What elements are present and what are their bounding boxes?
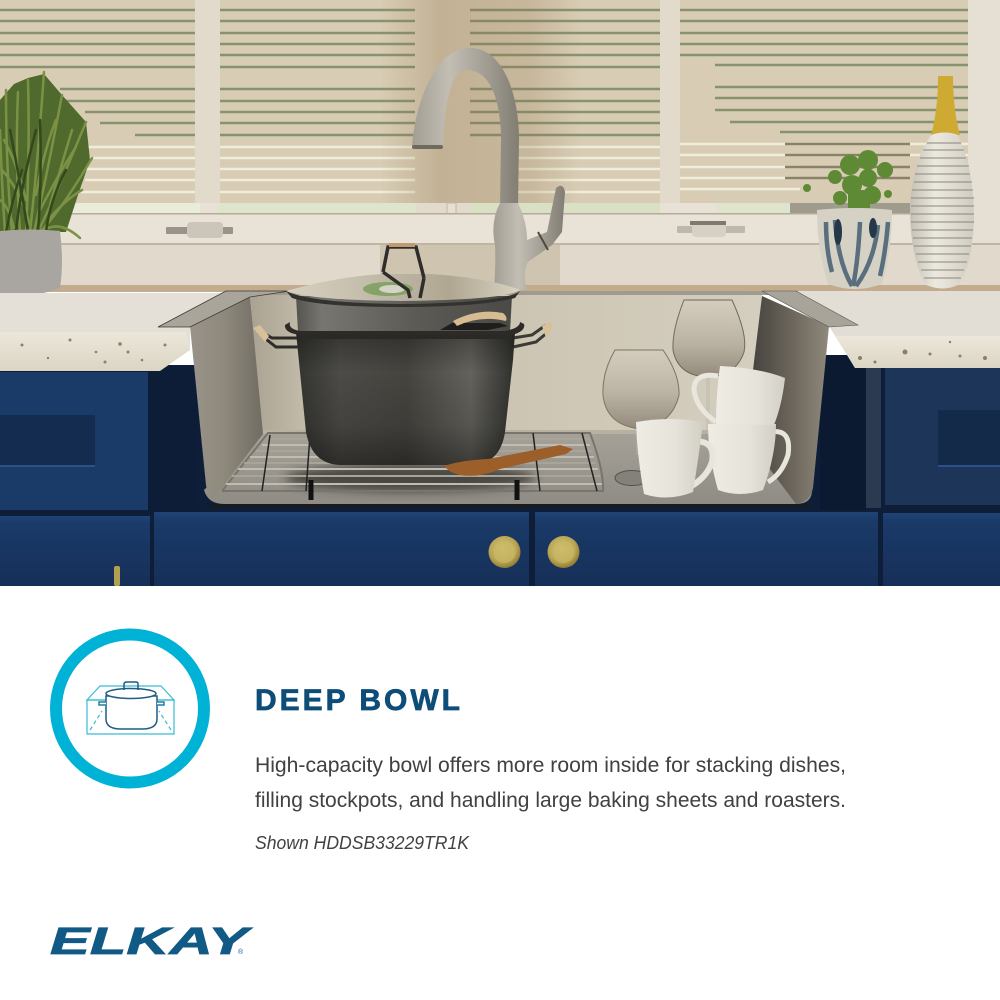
brass knob left xyxy=(488,536,520,568)
pot handle left xyxy=(253,325,298,347)
right door xyxy=(885,368,1000,505)
model caption: Shown HDDSB33229TR1K xyxy=(255,833,470,853)
Elkay logo: ® xyxy=(238,948,244,956)
body text: High-capacity bowl offers more room inside for stacking dishes, xyxy=(255,753,846,777)
dark gaps between slats xyxy=(0,10,968,135)
wine glass tall xyxy=(673,300,745,430)
herb plant in grey pot xyxy=(0,72,92,296)
upper pot tan handle xyxy=(440,323,508,330)
heading: DEEP BOWL xyxy=(255,684,460,717)
lower drawer centre right xyxy=(535,512,878,586)
sink floor xyxy=(204,434,812,504)
faucet xyxy=(412,48,565,290)
left door xyxy=(0,372,148,510)
sink left wall xyxy=(190,296,263,500)
pot handle right xyxy=(513,321,553,347)
body text: filling stockpots, and handling large baking sheets and roasters. xyxy=(255,788,846,812)
sink back wall xyxy=(250,294,762,436)
pale gaps between slats xyxy=(75,144,968,192)
lower drawer centre left xyxy=(154,512,529,586)
upper pot with lid xyxy=(285,245,524,339)
wine glass round xyxy=(603,350,679,455)
lower pot rim xyxy=(285,322,524,335)
left flange xyxy=(158,291,290,327)
brass handle xyxy=(114,566,120,586)
brass knob right xyxy=(548,536,580,568)
lower drawer right xyxy=(883,513,1000,586)
left countertop xyxy=(0,293,232,371)
large stock pot xyxy=(253,321,553,465)
upper mug xyxy=(694,366,785,425)
Elkay logo: ELKAY xyxy=(50,921,254,963)
sink xyxy=(158,291,858,507)
mug stack right xyxy=(694,366,789,494)
striped vase with gold neck xyxy=(910,76,974,288)
window latch left xyxy=(166,222,233,238)
window latch right xyxy=(677,221,745,237)
lid xyxy=(286,274,520,301)
lid handle xyxy=(383,247,424,298)
icon: pot in deep bowl xyxy=(56,634,204,782)
mug front xyxy=(636,419,713,498)
window frame and sill xyxy=(0,203,1000,292)
ladder strips xyxy=(195,0,220,203)
lower mug xyxy=(708,424,789,494)
sink drain xyxy=(615,470,649,486)
lower drawer left xyxy=(0,516,150,586)
icon: pot xyxy=(99,682,164,729)
body text xyxy=(255,753,846,812)
cabinets xyxy=(0,355,1000,586)
kitchen photo scene xyxy=(0,0,1000,586)
Elkay logo xyxy=(50,921,254,963)
wire grid rack xyxy=(222,433,603,500)
right flange xyxy=(762,291,858,327)
wooden spatula xyxy=(444,445,573,476)
icon: sink box xyxy=(87,686,174,734)
window with blinds xyxy=(0,0,1000,292)
icon ring xyxy=(56,634,204,782)
small plant in patterned pot xyxy=(803,150,893,289)
right countertop xyxy=(795,291,1000,368)
dark gaps right low xyxy=(785,144,910,178)
sink rim xyxy=(226,291,798,295)
sink right wall xyxy=(745,296,829,504)
